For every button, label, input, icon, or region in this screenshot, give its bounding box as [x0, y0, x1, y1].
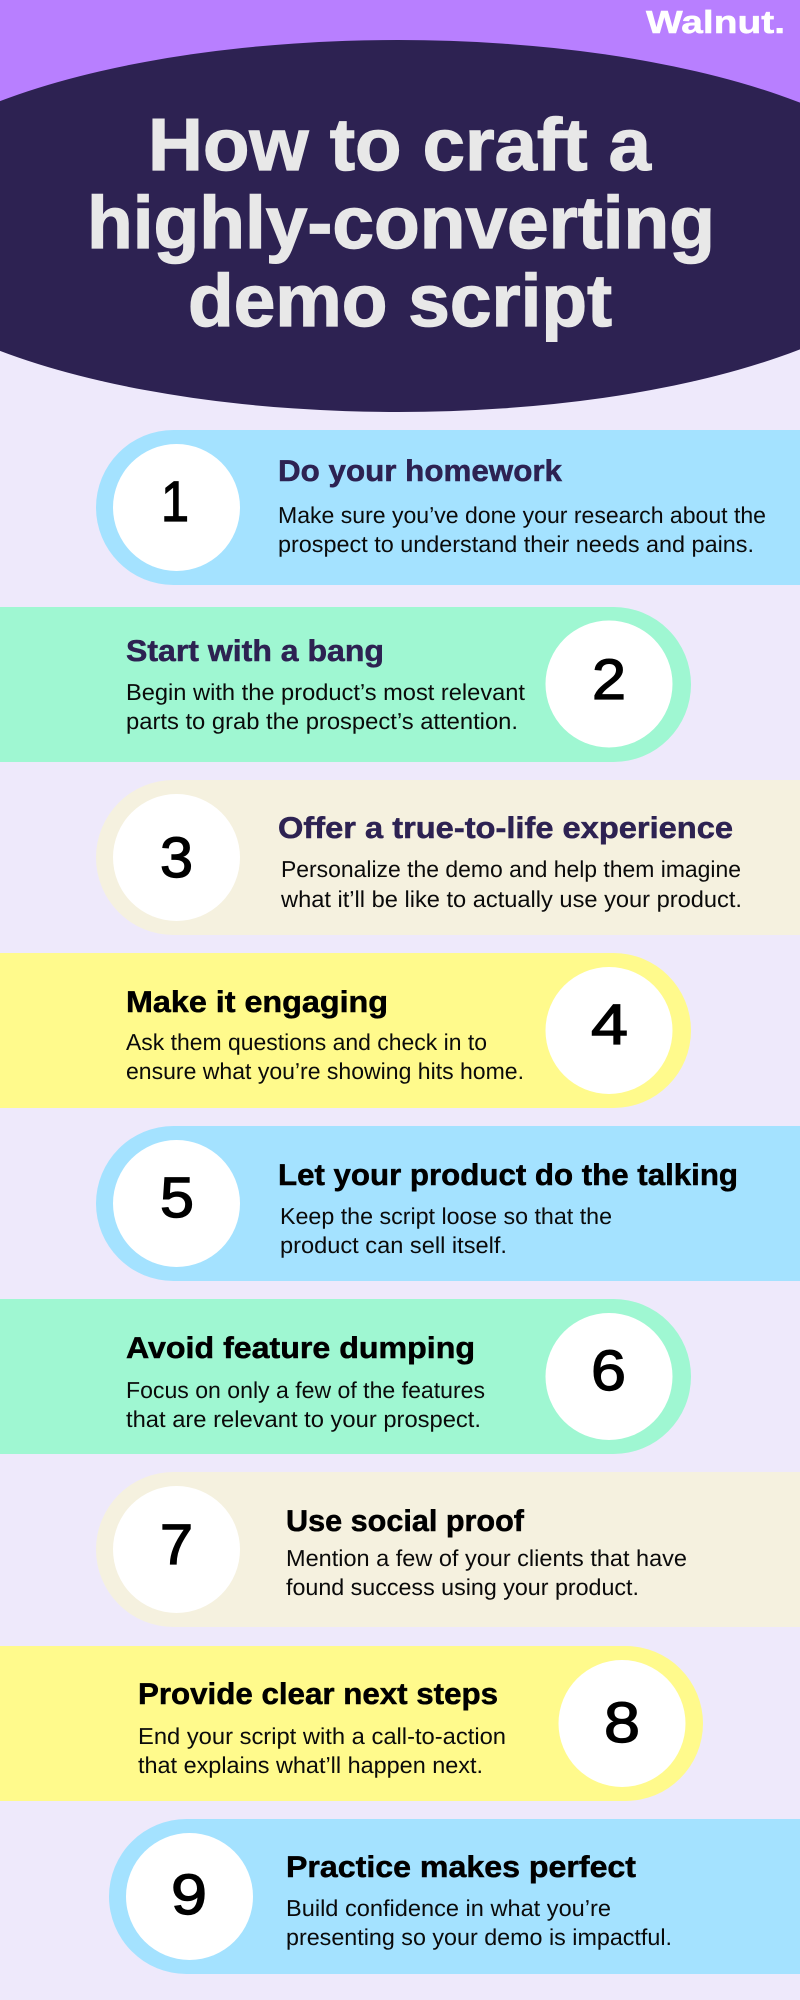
- body: step 7: found success using your product.: [286, 1574, 639, 1600]
- number badge 5: 5: [160, 1166, 194, 1230]
- panel: step 5: [96, 1126, 800, 1281]
- number badge 9: [126, 1833, 253, 1960]
- number badge 1: 1: [161, 470, 189, 534]
- number badge 9: 9: [171, 1863, 207, 1927]
- body: step 7: [286, 1545, 687, 1600]
- panel: step 1: [96, 430, 800, 585]
- heading: step 5: Let your product do the talking: [278, 1159, 738, 1192]
- heading: step 4: Make it engaging: [126, 986, 388, 1019]
- panel: step 8: [0, 1646, 703, 1801]
- body: step 1: prospect to understand their needs and pains.: [278, 531, 754, 557]
- body: step 4: [126, 1029, 524, 1084]
- number badge 2: 2: [592, 648, 626, 712]
- body: step 6: Focus on only a few of the features: [126, 1377, 485, 1403]
- body: step 3: [280, 856, 742, 912]
- panel: step 7: [96, 1472, 800, 1627]
- title: [87, 103, 715, 342]
- body: step 1: Make sure you’ve done your research about the: [278, 502, 766, 528]
- body: step 2: [126, 679, 526, 734]
- heading: step 7: Use social proof: [286, 1505, 525, 1538]
- body: step 8: that explains what’ll happen next.: [138, 1752, 483, 1778]
- number badge 5: [113, 1140, 240, 1267]
- heading: step 2: Start with a bang: [126, 635, 384, 668]
- body: step 8: End your script with a call-to-action: [138, 1723, 506, 1749]
- body: step 8: [138, 1723, 506, 1778]
- number badge 1: [113, 444, 240, 571]
- heading: step 8: Provide clear next steps: [138, 1678, 498, 1711]
- number badge 4: [546, 967, 672, 1094]
- body: step 5: [280, 1203, 612, 1258]
- title: How to craft a: [148, 103, 652, 186]
- body: step 6: [126, 1377, 485, 1432]
- title: demo script: [188, 259, 612, 342]
- heading: step 3: Offer a true-to-life experience: [278, 812, 733, 845]
- number badge 6: [546, 1313, 672, 1440]
- body: step 9: presenting so your demo is impactful.: [286, 1924, 672, 1950]
- panel: step 4: [0, 953, 691, 1108]
- panel: step 9: [109, 1819, 800, 1974]
- body: step 7: Mention a few of your clients that have: [286, 1545, 687, 1571]
- title banner: [0, 40, 800, 412]
- body: step 2: Begin with the product’s most relevant: [126, 679, 526, 705]
- heading: step 9: Practice makes perfect: [286, 1851, 636, 1884]
- title: highly-converting: [87, 181, 715, 264]
- body: step 5: Keep the script loose so that the: [280, 1203, 612, 1229]
- number badge 2: [546, 620, 672, 748]
- body: step 4: Ask them questions and check in to: [126, 1029, 487, 1055]
- panel: step 2: [0, 607, 691, 762]
- body: step 5: product can sell itself.: [280, 1232, 507, 1258]
- heading: step 6: Avoid feature dumping: [126, 1332, 475, 1365]
- logo: Walnut: Walnut.: [646, 4, 785, 40]
- number badge 7: 7: [160, 1513, 193, 1577]
- body: step 6: that are relevant to your prospect.: [126, 1406, 481, 1432]
- number badge 3: [113, 794, 240, 921]
- body: step 9: [286, 1895, 672, 1950]
- body: step 2: parts to grab the prospect’s attention.: [126, 708, 518, 734]
- panel: step 6: [0, 1299, 691, 1454]
- number badge 4: 4: [591, 993, 628, 1057]
- panel: step 3: [96, 780, 800, 935]
- number badge 6: 6: [591, 1339, 626, 1403]
- body: step 3: Personalize the demo and help them imagine: [281, 856, 741, 882]
- body: step 1: [278, 502, 766, 557]
- number badge 7: [113, 1486, 240, 1613]
- body: step 4: ensure what you’re showing hits home.: [126, 1058, 524, 1084]
- number badge 3: 3: [160, 826, 193, 890]
- header band: [0, 0, 800, 230]
- number badge 8: [558, 1660, 686, 1787]
- body: step 9: Build confidence in what you’re: [286, 1895, 611, 1921]
- number badge 8: 8: [604, 1691, 640, 1755]
- body: step 3: what it’ll be like to actually use your product.: [280, 886, 742, 912]
- heading: step 1: Do your homework: [278, 455, 562, 488]
